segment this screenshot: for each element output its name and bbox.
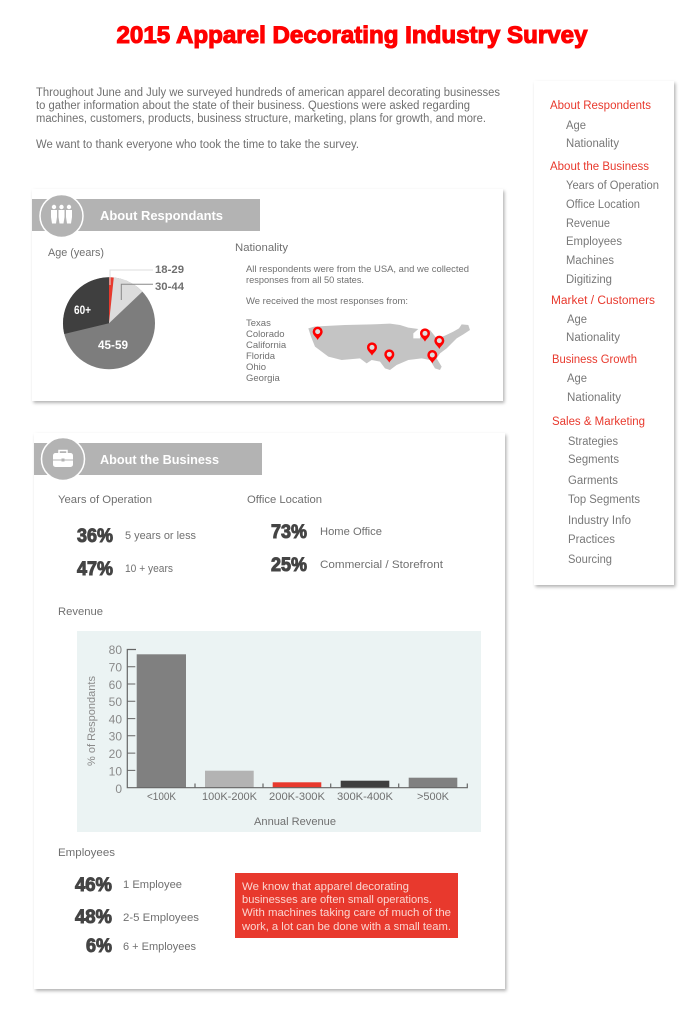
office location: 25%: [271, 555, 307, 576]
bar chart: revenue: >500K: [417, 791, 450, 803]
bar chart: revenue: <100K: [147, 791, 177, 803]
sidebar: navigation: Age: [567, 314, 587, 326]
list of states: Colorado: [246, 329, 285, 340]
office location: Commercial / Storefront: [320, 559, 443, 571]
nationality text: responses from all 50 states.: [246, 275, 364, 286]
callout: With machines taking care of much of the: [242, 907, 451, 919]
bar chart: revenue: 20: [109, 747, 122, 761]
employees: 6%: [86, 936, 112, 957]
section header: about the business: About the Business: [100, 453, 219, 467]
pie chart: age: 30-44: [155, 281, 185, 293]
title: 2015 Apparel Decorating Industry Survey: [116, 22, 588, 49]
intro text: Throughout June and July we surveyed hundreds of american apparel decorating businesses: [36, 87, 500, 99]
list of states: Ohio: [246, 362, 266, 373]
years of operation: 36%: [77, 526, 113, 547]
intro text: to gather information about the state of their business. Questions were asked regarding: [36, 100, 470, 112]
pie chart: age: 18-29: [155, 264, 184, 276]
intro text: machines, customers, products, business structure, marketing, plans for growth, and more.: [36, 113, 486, 125]
section header: about respondents: About Respondants: [100, 209, 223, 223]
bar chart: revenue: Annual Revenue: [254, 816, 336, 828]
sidebar: navigation: Nationality: [566, 138, 619, 150]
pie chart: age: [63, 264, 185, 369]
panel: about respondents: [32, 189, 503, 401]
icon: people: [51, 205, 72, 224]
icon: briefcase: [53, 450, 73, 467]
nationality text: We received the most responses from:: [246, 296, 408, 307]
years of operation: Years of Operation: [58, 494, 152, 506]
employees: 46%: [75, 875, 112, 896]
office location: 73%: [271, 522, 307, 543]
office location: Office Location: [247, 494, 322, 506]
panel: about the business: [34, 433, 505, 989]
intro text: We want to thank everyone who took the time to take the survey.: [36, 139, 359, 151]
list of states: Texas: [246, 318, 271, 329]
employees: 48%: [75, 907, 112, 928]
office location: [247, 494, 443, 576]
employees: Employees: [58, 847, 116, 859]
section header: about respondents: [32, 194, 260, 238]
years of operation: 10 + years: [125, 563, 173, 575]
bar chart: revenue: 200K-300K: [269, 791, 326, 803]
list of states: Florida: [246, 351, 276, 362]
bar chart: revenue: 100K-200K: [202, 791, 258, 803]
bar chart: revenue: 60: [109, 678, 122, 692]
bar chart: revenue: 30: [109, 730, 122, 744]
callout: [235, 873, 458, 938]
intro text: [36, 87, 500, 151]
bar chart: revenue: [77, 631, 481, 832]
sidebar: navigation: Nationality: [567, 392, 621, 404]
sidebar: navigation: Revenue: [566, 218, 610, 230]
callout: We know that apparel decorating: [242, 881, 409, 893]
years of operation: 47%: [77, 559, 113, 580]
bar chart: revenue: 50: [109, 695, 122, 709]
sidebar: navigation: Digitizing: [566, 274, 612, 286]
sidebar: navigation: Sales & Marketing: [552, 416, 645, 428]
employees: [58, 847, 200, 957]
sidebar: navigation: Machines: [566, 255, 614, 267]
sidebar: navigation: Top Segments: [568, 494, 640, 506]
sidebar: navigation: [534, 81, 674, 585]
map: USA with pins: [308, 324, 470, 370]
bar chart: revenue: 40: [109, 712, 122, 726]
sidebar: navigation: Years of Operation: [566, 180, 659, 192]
sidebar: navigation: Market / Customers: [551, 295, 655, 307]
employees: 6 + Employees: [123, 941, 196, 953]
callout: work, a lot can be done with a small team.: [241, 921, 451, 933]
bar chart: revenue: 300K-400K: [337, 791, 394, 803]
pie chart: age: 60+: [74, 303, 91, 317]
list of states: Georgia: [246, 373, 281, 384]
bar chart: revenue: 10: [109, 764, 122, 778]
sidebar: navigation: About the Business: [550, 161, 649, 173]
sidebar: navigation: Sourcing: [568, 554, 612, 566]
nationality text: [246, 264, 469, 307]
sidebar: navigation: Employees: [566, 236, 622, 248]
pie chart: age: 45-59: [98, 338, 128, 352]
sidebar: navigation: Industry Info: [568, 515, 631, 527]
years of operation: 5 years or less: [125, 530, 196, 542]
employees: 2-5 Employees: [123, 912, 200, 924]
sidebar: navigation: Age: [567, 373, 587, 385]
section header: about the business: [34, 438, 262, 480]
list of states: [246, 318, 287, 384]
years of operation: [58, 494, 196, 580]
sidebar: navigation: Segments: [568, 454, 619, 466]
sidebar: navigation: Nationality: [566, 332, 620, 344]
bar chart: revenue: 70: [109, 660, 122, 674]
sidebar: navigation: Strategies: [568, 436, 618, 448]
sidebar: navigation: Business Growth: [552, 354, 637, 366]
sidebar: navigation: Age: [566, 120, 586, 132]
office location: Home Office: [320, 526, 382, 538]
bar chart: revenue: 0: [115, 782, 122, 796]
bar chart: revenue: 80: [109, 643, 122, 657]
nationality text: All respondents were from the USA, and we collected: [246, 264, 469, 275]
heading: age: Age (years): [48, 247, 104, 259]
sidebar: navigation: About Respondents: [550, 100, 651, 112]
sidebar: navigation: Practices: [568, 534, 615, 546]
heading: nationality: Nationality: [235, 242, 289, 254]
heading: revenue: Revenue: [58, 606, 103, 618]
callout: businesses are often small operations.: [242, 894, 432, 906]
list of states: California: [246, 340, 287, 351]
employees: 1 Employee: [123, 879, 182, 891]
sidebar: navigation: Office Location: [566, 199, 640, 211]
sidebar: navigation: Garments: [568, 475, 618, 487]
bar chart: revenue: % of Respondants: [86, 675, 98, 766]
